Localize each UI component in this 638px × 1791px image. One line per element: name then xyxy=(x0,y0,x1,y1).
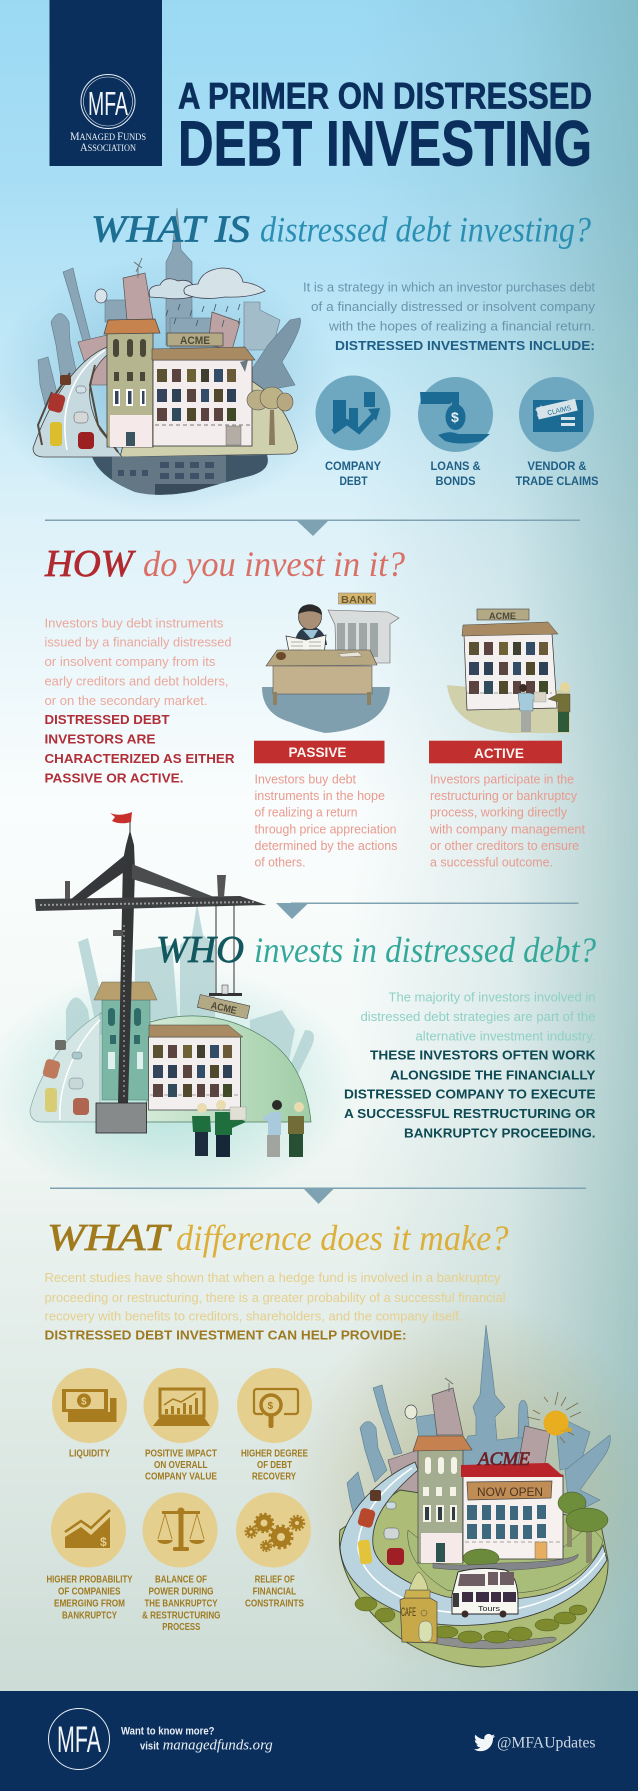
text: difference description xyxy=(44,1270,506,1342)
heading: what difference: difference does it make? xyxy=(176,1218,508,1258)
heading: how: do you invest in it? xyxy=(143,544,405,584)
sign: ACME: ACME xyxy=(489,611,516,622)
banner: now open xyxy=(467,1481,552,1500)
icon: higher degree of debt recovery: $ xyxy=(268,1401,274,1412)
icon: higher probability xyxy=(51,1492,126,1568)
tour bus xyxy=(452,1568,518,1618)
labels: benefits top row: OF DEBT xyxy=(257,1460,292,1471)
sign: ACME: ACME xyxy=(476,1449,530,1470)
icon: liquidity: $ xyxy=(81,1396,87,1408)
text: who description: A SUCCESSFUL RESTRUCTURING OR xyxy=(344,1106,596,1121)
banner: now open: NOW OPEN xyxy=(477,1485,543,1499)
badge: active: ACTIVE xyxy=(474,745,524,761)
text: how description: or on the secondary market. xyxy=(44,693,208,708)
text: who description: The majority of investors involved in xyxy=(388,990,596,1005)
heading: who: invests in distressed debt? xyxy=(254,930,596,970)
crane xyxy=(35,812,266,1103)
cars xyxy=(357,1490,404,1565)
labels: benefits top row xyxy=(69,1448,308,1483)
green hill xyxy=(146,1016,311,1122)
illustration: distressed city xyxy=(33,208,301,500)
sign: ACME xyxy=(167,333,223,347)
white building xyxy=(461,1463,564,1559)
labels: benefits bottom row: EMERGING FROM xyxy=(54,1598,125,1609)
badge: passive: PASSIVE xyxy=(288,744,346,760)
heading: who xyxy=(156,929,596,971)
text: active description: Investors participate in the xyxy=(430,771,574,786)
road xyxy=(33,347,122,457)
skyline xyxy=(38,208,301,405)
shrub xyxy=(463,1549,499,1567)
labels: benefits top row: ON OVERALL xyxy=(154,1460,208,1471)
icon: positive impact xyxy=(144,1368,218,1443)
labels: benefits bottom row: PROCESS xyxy=(162,1622,201,1633)
label: loans and bonds: BONDS xyxy=(436,474,476,488)
label: vendor and trade claims: TRADE CLAIMS xyxy=(516,474,598,488)
road xyxy=(340,1462,607,1625)
walkway xyxy=(433,1554,578,1571)
text: active description: or other creditors to ensure xyxy=(430,838,579,853)
label: loans and bonds xyxy=(430,459,481,488)
text: passive description: of realizing a return xyxy=(254,805,358,820)
people xyxy=(192,1100,304,1157)
heading: what difference: WHAT xyxy=(47,1217,172,1259)
labels: benefits bottom row: BANKRUPTCY xyxy=(62,1610,117,1621)
text: passive description: of others. xyxy=(254,855,306,870)
text: difference description: proceeding or restructuring, there is a greater probability of a successful financial xyxy=(44,1290,506,1305)
icon: liquidity xyxy=(52,1368,127,1443)
tour bus: Tours xyxy=(478,1604,500,1613)
logo: MFA emblem: MFA xyxy=(88,85,129,122)
hanging sign: ACME xyxy=(197,995,250,1020)
white office building xyxy=(152,347,255,446)
organisation name: ASSOCIATION xyxy=(80,142,136,154)
labels: benefits bottom row: POWER DURING xyxy=(148,1587,214,1598)
teal tower xyxy=(94,982,157,1100)
text: how description: INVESTORS ARE xyxy=(44,731,156,746)
text: who description: BANKRUPTCY PROCEEDING. xyxy=(404,1125,596,1140)
labels: benefits bottom row: & RESTRUCTURING xyxy=(142,1610,221,1621)
inner green xyxy=(408,1525,603,1594)
label: company debt xyxy=(325,459,381,488)
text: who description: DISTRESSED COMPANY TO EXECUTE xyxy=(344,1087,596,1102)
clouds and rain xyxy=(149,268,265,327)
text: who description: alternative investment industry. xyxy=(416,1029,596,1044)
labels: benefits bottom row: FINANCIAL xyxy=(253,1587,296,1598)
call to action: managedfunds.org xyxy=(163,1738,273,1754)
label: company debt: DEBT xyxy=(340,474,368,488)
text: who description: THESE INVESTORS OFTEN WORK xyxy=(370,1048,596,1063)
hedges xyxy=(355,1597,587,1643)
labels: benefits top row: COMPANY VALUE xyxy=(145,1472,217,1483)
text: passive description xyxy=(254,771,398,870)
text: how description xyxy=(44,615,235,785)
illustration: crane and construction site xyxy=(30,812,314,1157)
label: vendor and trade claims: VENDOR & xyxy=(528,459,587,473)
label: loans and bonds: LOANS & xyxy=(430,459,481,473)
bank building xyxy=(328,610,399,663)
icon: higher degree of debt recovery xyxy=(237,1368,312,1443)
heading: who: WHO xyxy=(156,929,244,971)
labels: benefits top row: RECOVERY xyxy=(252,1472,296,1483)
concrete block xyxy=(96,1103,146,1133)
text: how description: or insolvent company from its xyxy=(44,654,216,669)
labels: benefits bottom row: OF COMPANIES xyxy=(58,1587,121,1598)
heading: what difference xyxy=(47,1217,508,1259)
organisation name xyxy=(70,131,146,154)
text: passive description: Investors buy debt xyxy=(254,771,356,786)
text: what is description: It is a strategy in which an investor purchases debt xyxy=(303,280,595,295)
text: passive description: instruments in the hope xyxy=(254,788,385,803)
reflection xyxy=(92,455,268,495)
labels: benefits bottom row: CONSTRAINTS xyxy=(245,1598,304,1609)
skyline xyxy=(347,1325,610,1520)
icon: balance of power xyxy=(142,1492,218,1568)
flag xyxy=(110,812,132,823)
building xyxy=(462,622,558,710)
logo: MFA emblem xyxy=(81,74,135,128)
cafe: CAFE xyxy=(401,1605,416,1619)
sun xyxy=(527,1392,581,1443)
logo: MFA emblem: MFA xyxy=(57,1718,101,1761)
text: what is description: with the hopes of realizing a financial return. xyxy=(328,319,595,334)
illustration: recovered city xyxy=(339,1325,610,1667)
text: who description: distressed debt strategies are part of the xyxy=(360,1009,596,1024)
text: how description: DISTRESSED DEBT xyxy=(44,712,170,727)
text: how description: issued by a financially distressed xyxy=(44,635,232,650)
text: difference description: Recent studies have shown that when a hedge fund is involved in a bankruptcy xyxy=(44,1270,501,1285)
text: what is description: DISTRESSED INVESTMENTS INCLUDE: xyxy=(335,338,595,353)
icon: vendor and trade claims xyxy=(519,377,594,452)
desk xyxy=(266,650,377,705)
illustration: passive investor at desk xyxy=(262,593,399,733)
text: how description: CHARACTERIZED AS EITHER xyxy=(44,751,235,766)
tower xyxy=(413,1436,472,1563)
text: active description: with company management xyxy=(429,821,585,836)
heading: how xyxy=(44,543,405,585)
icon: twitter bird xyxy=(474,1734,495,1751)
badge: active xyxy=(429,741,562,763)
labels: benefits bottom row: HIGHER PROBABILITY xyxy=(46,1575,133,1586)
divider arrow 3 xyxy=(50,1188,586,1204)
text: who description xyxy=(344,990,596,1140)
hanging sign: ACME: ACME xyxy=(210,1000,238,1017)
text: who description: ALONGSIDE THE FINANCIALLY xyxy=(390,1067,596,1082)
trees xyxy=(558,1492,608,1563)
title xyxy=(178,76,592,180)
text: what is description: of a financially distressed or insolvent company xyxy=(311,299,596,314)
labels: benefits bottom row: RELIEF OF xyxy=(255,1575,295,1586)
organisation name: MANAGED FUNDS xyxy=(70,131,146,143)
labels: benefits top row: HIGHER DEGREE xyxy=(241,1448,308,1459)
faded skyline xyxy=(66,903,314,1090)
text: active description: process, working directly xyxy=(430,805,567,820)
cars xyxy=(47,375,94,449)
labels: benefits top row: LIQUIDITY xyxy=(69,1448,110,1459)
twitter handle: @MFAUpdates xyxy=(497,1734,596,1751)
labels: benefits bottom row: BALANCE OF xyxy=(155,1575,207,1586)
text: passive description: through price appreciation xyxy=(254,821,396,836)
logo: MFA emblem xyxy=(48,1708,110,1770)
labels: benefits top row: POSITIVE IMPACT xyxy=(145,1448,217,1459)
icon: loans and bonds xyxy=(418,377,493,452)
text: passive description: determined by the actions xyxy=(254,838,398,853)
badge: passive xyxy=(254,741,384,763)
text: active description xyxy=(429,771,585,870)
text: active description: restructuring or bankruptcy xyxy=(430,788,577,803)
text: what is description xyxy=(303,280,596,353)
text: how description: PASSIVE OR ACTIVE. xyxy=(44,770,184,785)
icon: loans and bonds: $ xyxy=(451,409,459,425)
heading: what is: WHAT IS xyxy=(91,209,250,251)
text: how description: Investors buy debt instruments xyxy=(44,615,224,630)
labels: benefits bottom row: THE BANKRUPTCY xyxy=(144,1598,218,1609)
call to action: visit xyxy=(140,1741,159,1753)
sign: ACME: ACME xyxy=(180,335,210,347)
labels: benefits bottom row xyxy=(46,1575,304,1633)
cafe xyxy=(400,1572,437,1643)
footer panel xyxy=(0,1691,638,1791)
icon: relief of financial constraints xyxy=(236,1492,311,1568)
old tower xyxy=(104,319,160,447)
text: active description: a successful outcome. xyxy=(430,855,553,870)
header logo panel xyxy=(50,0,162,166)
cars xyxy=(42,1040,89,1115)
icon: vendor and trade claims: CLAIMS xyxy=(547,405,572,417)
base ground xyxy=(339,1490,608,1667)
label: company debt: COMPANY xyxy=(325,459,381,473)
text: difference description: recovery with benefits to creditors, shareholders, and the company itself. xyxy=(44,1309,462,1324)
call to action: Want to know more? xyxy=(121,1726,215,1738)
label: vendor and trade claims xyxy=(516,459,598,488)
gray path xyxy=(428,1635,556,1649)
investor xyxy=(286,604,327,658)
sign: bank: BANK xyxy=(341,595,374,606)
ground xyxy=(120,380,298,457)
divider arrow 1 xyxy=(45,520,580,536)
icon: company debt xyxy=(316,376,390,450)
people xyxy=(518,682,570,732)
heading: what is: distressed debt investing? xyxy=(260,210,591,250)
illustration: active investors at building xyxy=(447,609,570,733)
call to action xyxy=(121,1726,273,1754)
road xyxy=(30,1013,102,1122)
tree xyxy=(247,387,293,445)
divider arrow 2 xyxy=(276,902,578,919)
text: difference description: DISTRESSED DEBT INVESTMENT CAN HELP PROVIDE: xyxy=(44,1328,407,1342)
icon: higher probability: $ xyxy=(100,1535,107,1549)
white office building xyxy=(148,1025,243,1110)
text: how description: early creditors and debt holders, xyxy=(44,674,228,689)
heading: what is xyxy=(91,209,591,251)
heading: how: HOW xyxy=(44,543,136,585)
